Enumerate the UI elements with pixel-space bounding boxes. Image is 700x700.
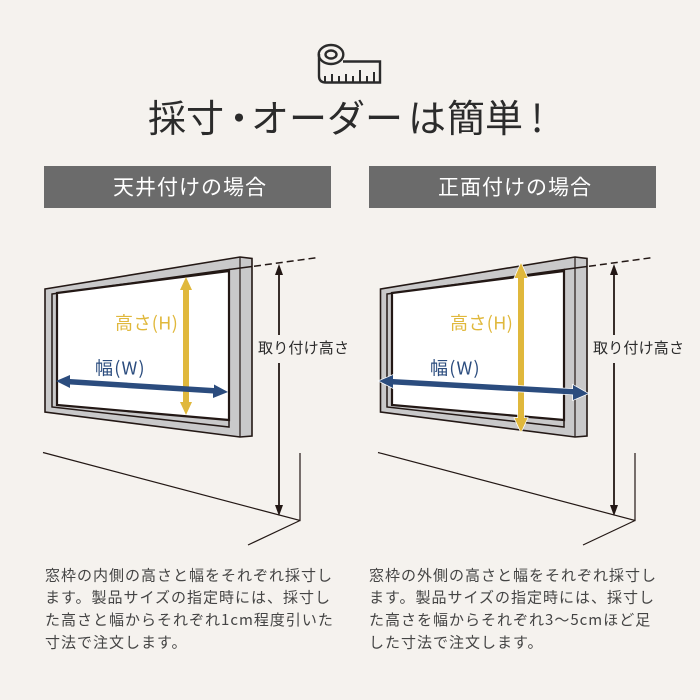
width arrow bbox=[56, 375, 228, 398]
label: width: 幅(W) bbox=[430, 354, 481, 380]
description: 窓枠の内側の高さと幅をそれぞれ採寸し bbox=[45, 564, 333, 586]
window frame diagram bbox=[380, 257, 587, 437]
description: 寸法で注文します。 bbox=[45, 632, 188, 652]
title: 採寸 bbox=[148, 88, 224, 143]
heading: front mount: 正面付けの場合 bbox=[438, 172, 592, 202]
title: は bbox=[408, 88, 446, 143]
description: ます。製品サイズの指定時には、採寸し bbox=[45, 586, 331, 608]
title: ・ bbox=[220, 88, 258, 143]
height arrow bbox=[514, 263, 528, 432]
description: 窓枠の外側の高さと幅をそれぞれ採寸し bbox=[369, 564, 657, 586]
width arrow bbox=[379, 375, 588, 400]
window frame diagram bbox=[45, 257, 252, 437]
label: installation height: 取り付け高さ bbox=[258, 337, 349, 358]
installation height arrow bbox=[254, 258, 318, 516]
heading: ceiling mount bbox=[44, 166, 331, 208]
title: ! bbox=[531, 88, 543, 143]
heading: ceiling mount: 天井付けの場合 bbox=[113, 172, 267, 202]
label: width: 幅(W) bbox=[95, 354, 146, 380]
installation height arrow bbox=[589, 258, 653, 516]
title: 簡単 bbox=[447, 88, 523, 143]
label: height: 高さ(H) bbox=[115, 310, 178, 336]
description: ます。製品サイズの指定時には、採寸し bbox=[369, 586, 655, 608]
icon: measuring tape bbox=[319, 45, 380, 82]
label: installation height: 取り付け高さ bbox=[593, 337, 684, 358]
description: た高さと幅からそれぞれ1cm程度引いた bbox=[45, 609, 334, 630]
room lines bbox=[43, 452, 300, 545]
room lines bbox=[378, 452, 635, 545]
description: した寸法で注文します。 bbox=[369, 632, 544, 652]
heading: front mount bbox=[369, 166, 656, 208]
title: オーダー bbox=[251, 88, 403, 143]
label: height: 高さ(H) bbox=[450, 310, 513, 336]
description: た高さを幅からそれぞれ3〜5cmほど足 bbox=[369, 609, 651, 630]
height arrow bbox=[180, 277, 192, 415]
panel: ceiling mount bbox=[43, 166, 349, 652]
panel: front mount bbox=[369, 166, 684, 652]
